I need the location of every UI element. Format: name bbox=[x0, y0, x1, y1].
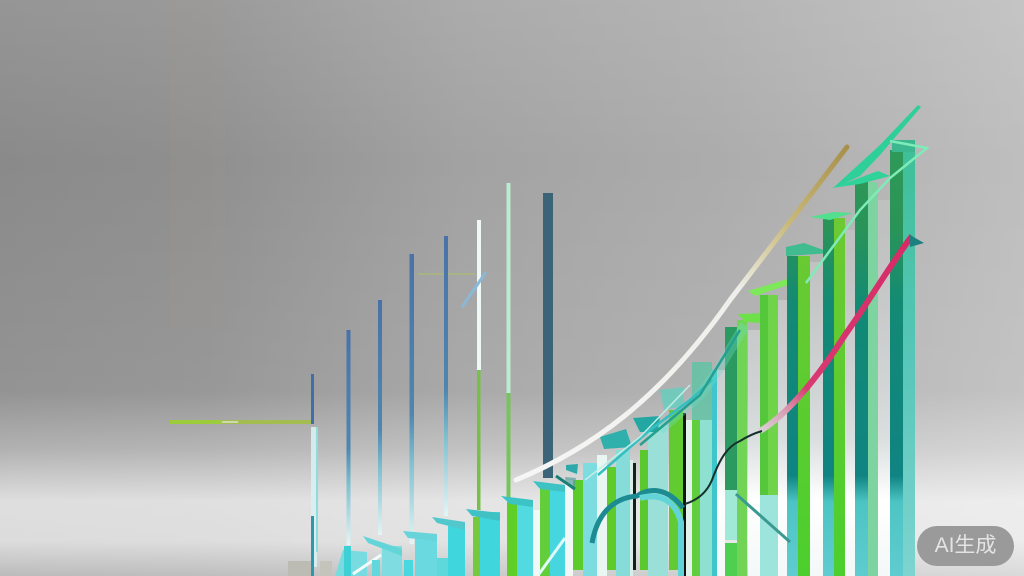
green bar 13 bbox=[725, 313, 768, 576]
cyan bar group 3 bbox=[403, 531, 437, 576]
green bar 11 bbox=[660, 387, 692, 576]
needle bar 5 bbox=[444, 236, 448, 516]
cyan bar group 6 bbox=[501, 496, 540, 576]
cyan bar group 1 bbox=[335, 546, 367, 576]
white rope trend line bbox=[516, 147, 847, 480]
thin needle bars bbox=[311, 183, 553, 576]
green bar 12 bbox=[692, 362, 717, 576]
needle bar 8 bbox=[543, 193, 553, 478]
right stepped bars bbox=[597, 105, 927, 576]
badge: AI生成 bbox=[917, 526, 1014, 566]
cyan bar group 7 bbox=[533, 481, 565, 576]
green bar 17 bbox=[832, 171, 890, 576]
dark curved line bbox=[592, 431, 790, 576]
faint marker line bbox=[418, 273, 476, 275]
green bar 9 bbox=[597, 429, 636, 576]
needle bar 1 bbox=[311, 374, 318, 576]
left cyan stepped bars bbox=[335, 463, 597, 576]
ribbon rail bbox=[806, 141, 927, 283]
pink trend line bbox=[760, 235, 924, 431]
green bar 15 bbox=[786, 243, 832, 576]
needle bar 6 bbox=[462, 220, 486, 510]
cyan bar group 8 bbox=[556, 463, 597, 576]
horizontal green marker bbox=[170, 420, 312, 424]
needle bar 7 bbox=[506, 183, 510, 498]
cyan bar group 2 bbox=[353, 536, 402, 576]
needle bar 4 bbox=[410, 254, 414, 544]
cyan bar group 4 bbox=[432, 517, 465, 576]
base blocks bbox=[288, 561, 332, 576]
green bar 16 bbox=[810, 212, 853, 576]
green bar 14 bbox=[748, 276, 797, 576]
teal mesh rails bbox=[585, 325, 745, 480]
upper ribbon bbox=[833, 105, 921, 188]
cyan bar group 5 bbox=[466, 509, 500, 576]
green bar 10 bbox=[633, 416, 668, 576]
badge: AI生成: AI生成 bbox=[935, 534, 996, 557]
needle bar 3 bbox=[378, 300, 382, 535]
bar gaps bbox=[717, 200, 890, 576]
green bar 18 bbox=[890, 140, 915, 576]
needle bar 2 bbox=[346, 330, 350, 545]
